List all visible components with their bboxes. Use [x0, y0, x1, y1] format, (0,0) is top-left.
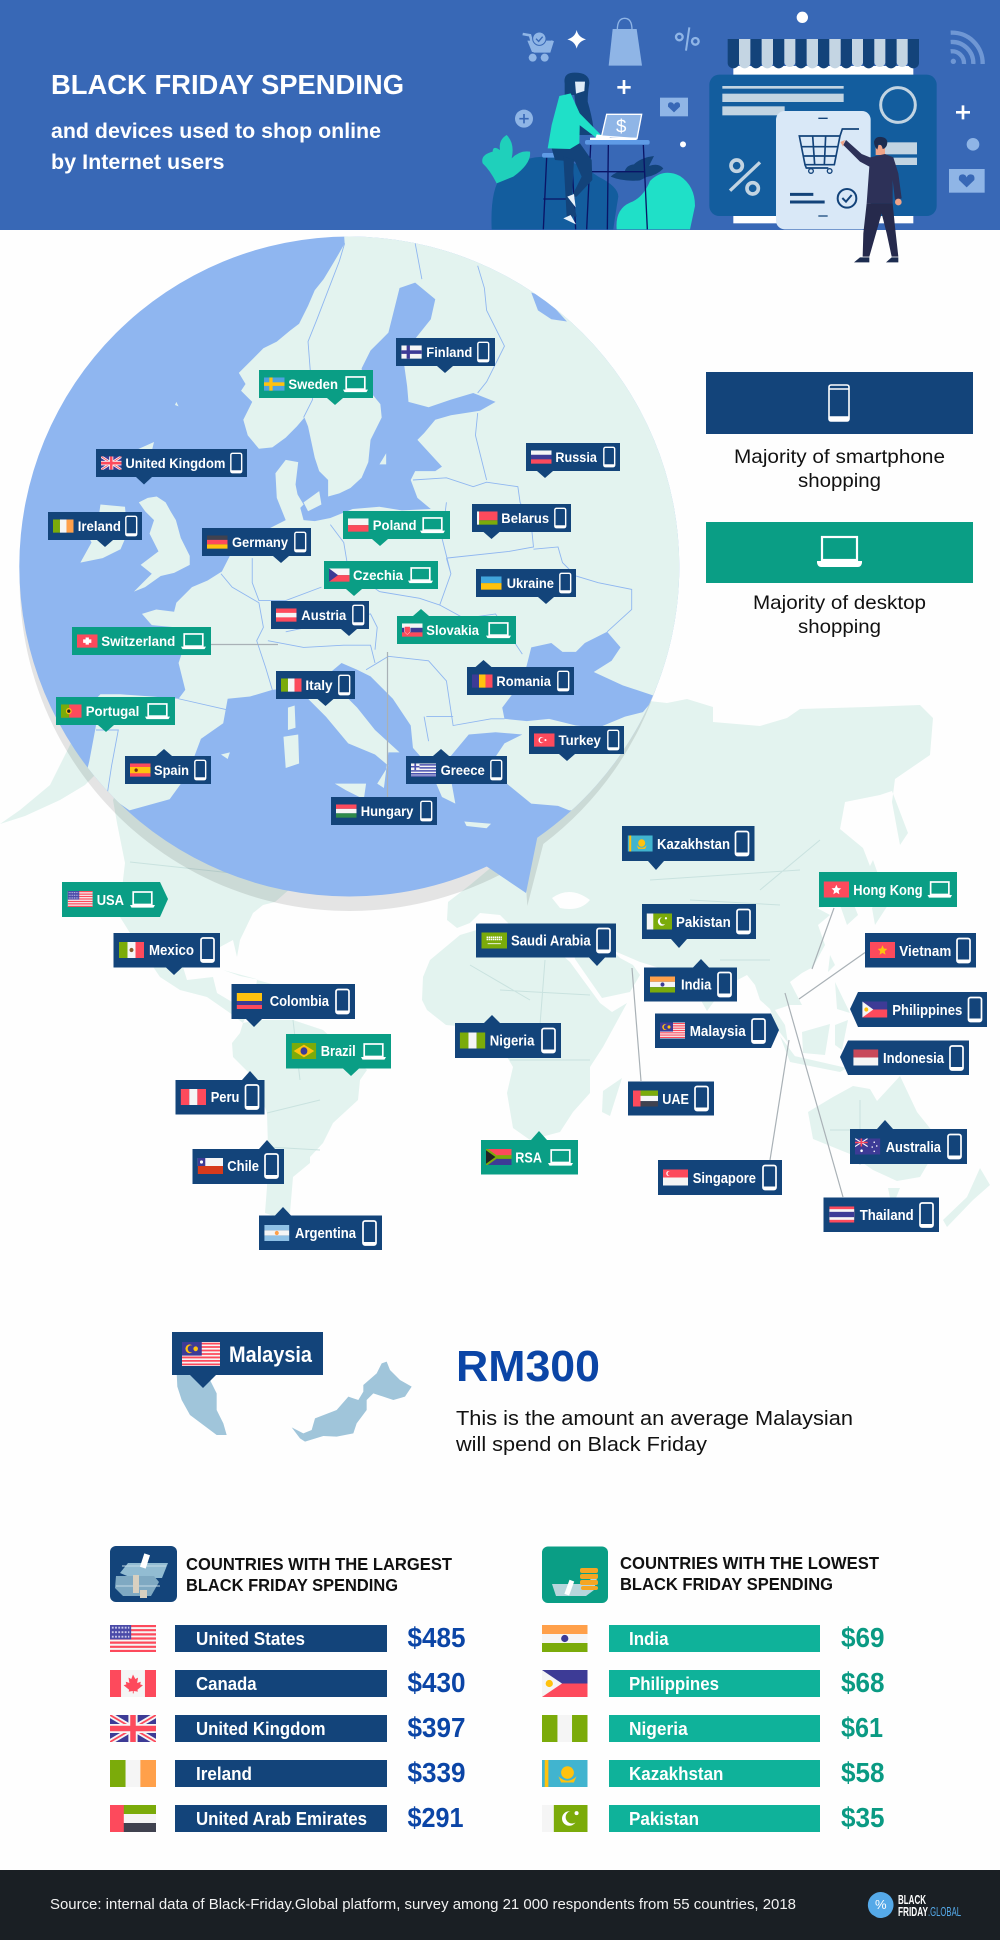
panel: lowest spending	[542, 1546, 884, 1833]
Madagascar	[602, 1078, 622, 1116]
row: Philippines: $68	[841, 1667, 884, 1698]
label: RSA: RSA	[515, 1150, 542, 1166]
amount description: This is the amount an average Malaysian	[456, 1407, 853, 1430]
label: Italy: Italy	[305, 678, 333, 693]
label: Colombia: Colombia	[270, 994, 330, 1010]
heading: BLACK FRIDAY SPENDING	[186, 1575, 398, 1595]
row: United States: $485	[408, 1622, 466, 1653]
big amount: RM300	[456, 1342, 600, 1391]
label: Austria	[271, 601, 369, 636]
label: Ireland	[48, 512, 142, 547]
label: Malaysia callout: Malaysia	[229, 1342, 313, 1367]
label: Czechia: Czechia	[353, 568, 403, 583]
label: Belarus	[472, 504, 571, 539]
legend: smartphone shopping: Majority of smartphone	[734, 446, 945, 468]
Eurasia	[447, 699, 933, 1043]
label: Saudi Arabia: Saudi Arabia	[511, 934, 592, 950]
label: Spain: Spain	[154, 763, 189, 778]
row: United Arab Emirates: $291	[408, 1802, 464, 1833]
label: Spain	[125, 749, 211, 784]
Black Sea and White Sea	[502, 293, 656, 728]
label: Chile	[192, 1140, 284, 1184]
heading: COUNTRIES WITH THE LOWEST	[620, 1553, 879, 1573]
map: Black Sea inset gap and country borders	[130, 840, 900, 1165]
label: Switzerland: Switzerland	[101, 634, 175, 649]
row: Nigeria	[542, 1712, 883, 1743]
label: Kazakhstan: Kazakhstan	[657, 837, 730, 853]
row: India: India	[629, 1629, 669, 1649]
title: BLACK FRIDAY SPENDING	[51, 69, 404, 100]
Europe mainland	[87, 230, 714, 810]
row: Nigeria: Nigeria	[629, 1719, 689, 1739]
label: Philippines: Philippines	[892, 1003, 962, 1019]
label: Argentina	[259, 1207, 382, 1250]
legend: desktop shopping: Majority of desktop	[753, 592, 926, 614]
label: Pakistan	[642, 904, 756, 948]
label: Hungary	[331, 797, 437, 825]
heading: BLACK FRIDAY SPENDING	[620, 1574, 833, 1594]
Europe islands	[80, 402, 491, 828]
globe: Europe close-up	[19, 236, 680, 896]
label: Sweden	[259, 370, 373, 405]
logo: .GLOBAL	[928, 1904, 961, 1919]
row: Canada: $430	[408, 1667, 466, 1698]
row: Kazakhstan	[542, 1757, 884, 1788]
label: Singapore: Singapore	[693, 1171, 756, 1187]
label: Turkey	[529, 726, 624, 761]
label: Czechia	[324, 561, 438, 596]
Malaysia map	[177, 1362, 412, 1442]
heading: COUNTRIES WITH THE LARGEST	[186, 1554, 452, 1574]
label: Ukraine	[476, 569, 576, 604]
heading	[620, 1553, 879, 1594]
label: Pakistan: Pakistan	[676, 915, 731, 931]
icon: money stacks	[110, 1546, 177, 1602]
label: Peru	[176, 1071, 264, 1114]
panel: largest spending	[110, 1546, 466, 1833]
label: Russia: Russia	[555, 450, 597, 465]
row: United States	[110, 1622, 466, 1653]
row: United Kingdom: United Kingdom	[196, 1719, 326, 1739]
label: Switzerland	[72, 627, 211, 655]
amount description: will spend on Black Friday	[455, 1433, 708, 1456]
label: Australia	[850, 1120, 967, 1164]
label: Malaysia	[655, 1014, 779, 1048]
label: Finland	[396, 338, 495, 373]
label: Malaysia callout	[172, 1332, 323, 1388]
footer band	[0, 1870, 1000, 1940]
label: Malaysia: Malaysia	[690, 1024, 747, 1040]
label: United Kingdom: United Kingdom	[125, 456, 225, 471]
row: Canada: Canada	[196, 1674, 258, 1694]
label: India	[644, 959, 737, 1002]
label: Peru: Peru	[211, 1090, 239, 1106]
New Zealand and islands	[223, 860, 990, 1227]
label: Hong Kong: Hong Kong	[853, 883, 923, 899]
label: Romania: Romania	[496, 674, 551, 689]
row: United States: United States	[196, 1629, 305, 1649]
label: Ukraine: Ukraine	[507, 576, 554, 591]
legend: smartphone shopping: shopping	[798, 470, 881, 492]
label: Nigeria	[455, 1015, 561, 1058]
heading	[186, 1554, 452, 1595]
shop front	[709, 39, 937, 229]
label: Hungary: Hungary	[361, 804, 414, 819]
hill and plants	[482, 135, 695, 229]
label: Poland: Poland	[373, 518, 417, 533]
label: Thailand	[824, 1198, 939, 1232]
row: Kazakhstan: $58	[841, 1757, 884, 1788]
legend: smartphone shopping	[706, 372, 973, 492]
row: Pakistan: $35	[841, 1802, 884, 1833]
label: Saudi Arabia	[476, 924, 616, 966]
label: USA	[62, 882, 168, 917]
row: Canada	[110, 1667, 466, 1698]
logo: BLACK	[898, 1892, 926, 1907]
label: Vietnam	[865, 933, 976, 968]
legend: desktop shopping: shopping	[798, 616, 881, 638]
Australia	[808, 1076, 936, 1181]
row: Ireland: Ireland	[196, 1764, 252, 1784]
illustration: online shop and shoppers	[482, 12, 985, 262]
header band	[0, 0, 1000, 230]
label: Mexico: Mexico	[149, 943, 194, 959]
label: Turkey: Turkey	[558, 733, 601, 748]
logo	[868, 1892, 961, 1919]
row: Kazakhstan: Kazakhstan	[629, 1764, 723, 1784]
label: Indonesia	[840, 1040, 969, 1075]
row: United Kingdom	[110, 1712, 466, 1743]
label: Mexico	[114, 933, 220, 975]
label: Chile: Chile	[227, 1159, 259, 1175]
label: Australia: Australia	[886, 1140, 942, 1156]
label: Belarus: Belarus	[501, 511, 549, 526]
source note: Source: internal data of Black-Friday.Global platform, survey among 21 000 respondents from 55 countries, 2018	[50, 1896, 796, 1913]
label: Brazil	[286, 1034, 391, 1076]
label: Colombia	[232, 984, 355, 1027]
label: Hong Kong	[819, 872, 957, 907]
label: Slovakia: Slovakia	[426, 623, 479, 638]
label: Ireland: Ireland	[78, 519, 121, 534]
label: Germany	[202, 528, 311, 563]
label: Singapore	[658, 1160, 782, 1195]
label: Greece	[406, 749, 507, 784]
row: United Kingdom: $397	[408, 1712, 466, 1743]
row: Pakistan: Pakistan	[629, 1809, 699, 1829]
label: Austria: Austria	[301, 608, 347, 623]
logo: %	[875, 1897, 887, 1912]
label: Brazil: Brazil	[321, 1044, 356, 1060]
label: Vietnam: Vietnam	[899, 944, 951, 960]
label: UAE: UAE	[662, 1092, 689, 1108]
legend: desktop shopping	[706, 522, 973, 638]
logo: FRIDAY	[898, 1904, 928, 1919]
icon: money and coins	[542, 1546, 608, 1603]
row: United Arab Emirates: United Arab Emirates	[196, 1809, 367, 1829]
label: UAE	[628, 1082, 714, 1116]
subtitle: and devices used to shop online	[51, 119, 381, 143]
label: Indonesia: Indonesia	[883, 1051, 945, 1067]
label: USA: USA	[97, 893, 124, 909]
icon: floating decorations	[515, 12, 985, 193]
label: Argentina: Argentina	[295, 1226, 357, 1242]
row: Ireland: $339	[408, 1757, 466, 1788]
person: woman with laptop	[542, 73, 650, 229]
Africa	[422, 929, 627, 1140]
label: Romania	[467, 660, 574, 695]
row: India: $69	[841, 1622, 884, 1653]
label: Portugal: Portugal	[86, 704, 139, 719]
person: woman with laptop: $	[616, 116, 627, 137]
row: United Arab Emirates	[110, 1802, 464, 1833]
label: Poland	[343, 511, 450, 546]
label: Italy	[276, 671, 355, 706]
label: India: India	[681, 978, 712, 994]
row: Nigeria: $61	[841, 1712, 883, 1743]
North and Central America	[0, 700, 300, 1023]
row: India	[542, 1622, 884, 1653]
connector lines	[211, 644, 865, 1197]
South America	[232, 1020, 367, 1217]
label: RSA	[481, 1131, 578, 1174]
world map land	[0, 699, 990, 1227]
amount description	[455, 1407, 853, 1456]
label: Slovakia	[397, 609, 516, 644]
label: United Kingdom	[96, 449, 247, 484]
row: Pakistan	[542, 1802, 884, 1833]
label: Thailand: Thailand	[860, 1208, 914, 1224]
subtitle	[51, 119, 381, 174]
subtitle: by Internet users	[51, 150, 225, 174]
row: Philippines: Philippines	[629, 1674, 719, 1694]
label: Sweden: Sweden	[288, 377, 338, 392]
label: Nigeria: Nigeria	[490, 1034, 535, 1050]
label: Philippines	[850, 992, 987, 1027]
row: Ireland	[110, 1757, 466, 1788]
person: man pointing at cart	[840, 137, 902, 262]
label: Kazakhstan	[622, 826, 754, 870]
row: Philippines	[542, 1667, 884, 1698]
Europe borders	[96, 243, 632, 795]
label: Russia	[526, 443, 620, 478]
globe shadow	[20, 251, 674, 911]
label: Greece: Greece	[441, 763, 485, 778]
label: Finland: Finland	[426, 345, 472, 360]
label: Germany: Germany	[232, 535, 288, 550]
label: Portugal	[56, 697, 175, 732]
